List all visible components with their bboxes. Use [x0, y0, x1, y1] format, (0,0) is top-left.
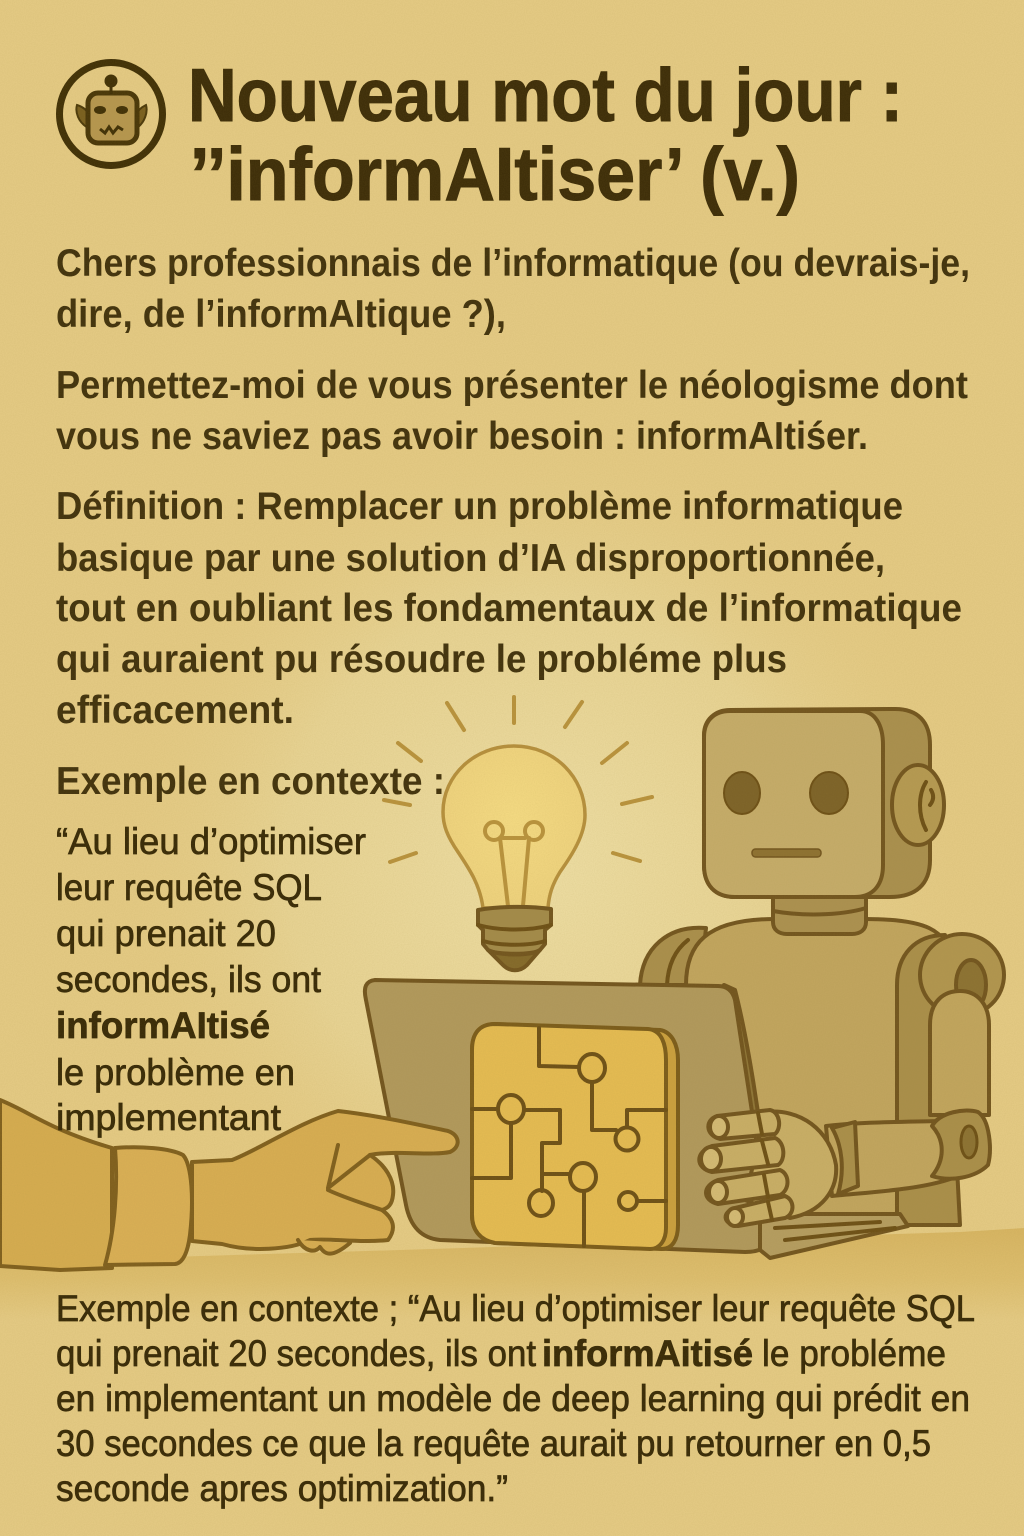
laptop	[365, 980, 908, 1258]
robot neck	[773, 895, 866, 934]
text block: narrow example quote: leur requête SQL	[56, 867, 322, 908]
text block: full example quote: informAitisé	[542, 1333, 753, 1374]
text block: full example quote: Exemple en contexte ; “Au lieu d’optimiser leur requête SQL	[56, 1288, 975, 1329]
title: Nouveau mot du jour :	[188, 53, 903, 137]
text block: narrow example quote: qui prenait 20	[56, 913, 276, 954]
robot left shoulder	[640, 928, 706, 985]
text block: narrow example quote: le problème en	[56, 1052, 295, 1093]
desk	[0, 1228, 1024, 1320]
text block: definition: qui auraient pu résoudre le probléme plus	[56, 638, 787, 681]
text block: narrow example quote	[56, 821, 366, 1138]
light bulb	[384, 697, 652, 970]
heading: example in context: Exemple en contexte :	[56, 760, 445, 803]
pointing hand	[0, 1100, 458, 1270]
text block: full example quote: en implementant un modèle de deep learning qui prédit en	[56, 1378, 970, 1419]
text block: definition: basique par une solution d’IA disproportionnée,	[56, 537, 885, 580]
illustration: robot, laptop, bulb and pointing hand	[0, 697, 1024, 1320]
text block: full example quote: 30 secondes ce que la requête aurait pu retourner en 0,5	[56, 1423, 931, 1464]
text block: introduction	[56, 364, 968, 458]
text block: narrow example quote: secondes, ils ont	[56, 959, 322, 1000]
text block: narrow example quote: informAItisé	[56, 1005, 270, 1046]
text block: greeting: dire, de l’informAItique ?),	[56, 293, 506, 336]
icon: robot head in circle	[60, 62, 162, 166]
text block: introduction: Permettez-moi de vous présenter le néologisme dont	[56, 364, 968, 407]
text block: full example quote: le probléme	[762, 1333, 946, 1374]
text block: greeting	[56, 242, 970, 336]
robot right arm	[920, 934, 1004, 1016]
text block: definition: efficacement.	[56, 689, 294, 732]
title: ’’informAItiser’ (v.)	[190, 132, 800, 216]
text block: full example quote	[56, 1288, 975, 1509]
text block: definition: Définition : Remplacer un problème informatique	[56, 485, 903, 528]
text block: definition	[56, 485, 962, 732]
text block: full example quote: qui prenait 20 secondes, ils ont	[56, 1333, 537, 1374]
robot hand	[699, 1110, 858, 1226]
text block: full example quote: seconde apres optimization.”	[56, 1468, 508, 1509]
robot	[640, 709, 1004, 1225]
text block: narrow example quote: implementant	[56, 1097, 282, 1138]
text block: narrow example quote: “Au lieu d’optimiser	[56, 821, 366, 862]
chip with circuit	[472, 1024, 678, 1249]
title	[188, 53, 903, 216]
robot body	[686, 919, 958, 1225]
robot head	[704, 709, 930, 897]
laptop base	[760, 1214, 908, 1258]
text block: introduction: vous ne saviez pas avoir besoin : informAItiśer.	[56, 415, 868, 458]
text block: definition: tout en oubliant les fondamentaux de l’informatique	[56, 587, 962, 630]
